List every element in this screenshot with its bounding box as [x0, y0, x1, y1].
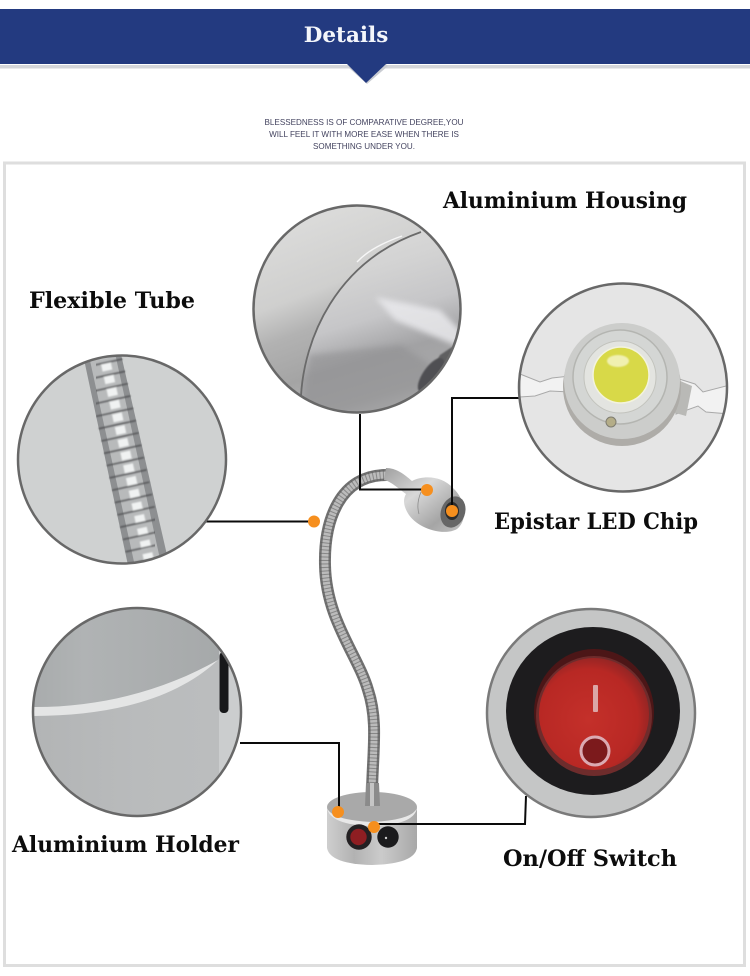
power socket on base — [377, 826, 399, 848]
detail circle: aluminium housing — [250, 200, 470, 420]
tagline: SOMETHING UNDER YOU. — [313, 142, 415, 151]
tagline — [265, 118, 464, 151]
detail circle: flexible tube — [15, 350, 230, 570]
tagline: WILL FEEL IT WITH MORE EASE WHEN THERE IS — [269, 130, 459, 139]
heading: Details: Details — [304, 23, 388, 48]
label: Aluminium Holder: Aluminium Holder — [11, 832, 240, 858]
label: Epistar LED Chip: Epistar LED Chip — [494, 509, 698, 535]
detail circle: LED chip — [515, 280, 731, 496]
label: On/Off Switch: On/Off Switch — [503, 846, 677, 872]
lamp head — [384, 468, 470, 532]
gooseneck tube — [325, 475, 388, 790]
orange marker dots — [308, 484, 458, 833]
label: Flexible Tube: Flexible Tube — [29, 288, 195, 314]
detail circle: on/off switch — [484, 606, 698, 820]
connector lines — [206, 398, 526, 824]
base cylinder — [327, 783, 417, 865]
tagline: BLESSEDNESS IS OF COMPARATIVE DEGREE,YOU — [265, 118, 464, 127]
header banner — [0, 9, 750, 84]
detail circle: aluminium holder — [30, 605, 249, 820]
label: Aluminium Housing: Aluminium Housing — [442, 188, 687, 214]
rocker switch on base — [346, 824, 372, 850]
banner pointer — [347, 64, 386, 83]
lamp illustration — [325, 468, 470, 865]
